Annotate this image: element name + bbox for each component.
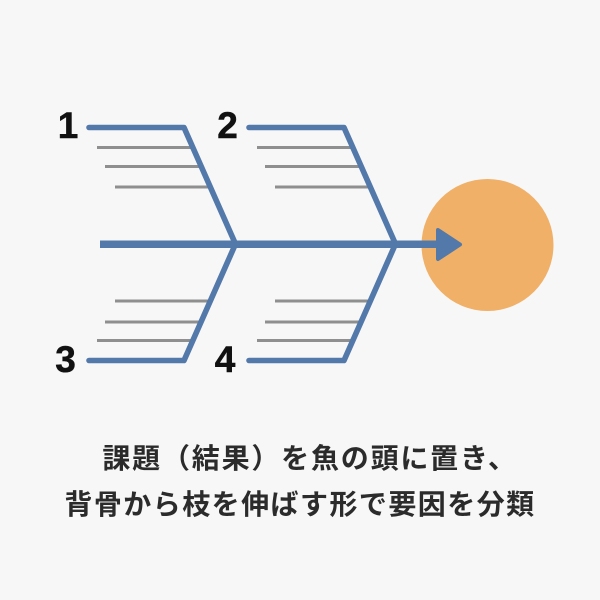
- caption line 1: 課題（結果）を魚の頭に置き、: [102, 443, 518, 474]
- effect circle: fish head: [422, 179, 554, 311]
- branch 1: [89, 128, 236, 244]
- number 2: 2: [217, 105, 238, 146]
- branch 4: [249, 244, 396, 360]
- number 4: 4: [215, 339, 236, 380]
- number 3: 3: [55, 339, 76, 380]
- caption line 2: 背骨から枝を伸ばす形で要因を分類: [64, 489, 536, 520]
- spine arrow: [100, 230, 460, 259]
- branch 3: [89, 244, 236, 360]
- detail lines: branch 1: [97, 148, 211, 187]
- number 1: 1: [58, 105, 78, 146]
- branch 2: [249, 128, 396, 244]
- detail lines: branch 4: [257, 301, 371, 340]
- detail lines: branch 2: [257, 148, 371, 187]
- detail lines: branch 3: [97, 301, 211, 340]
